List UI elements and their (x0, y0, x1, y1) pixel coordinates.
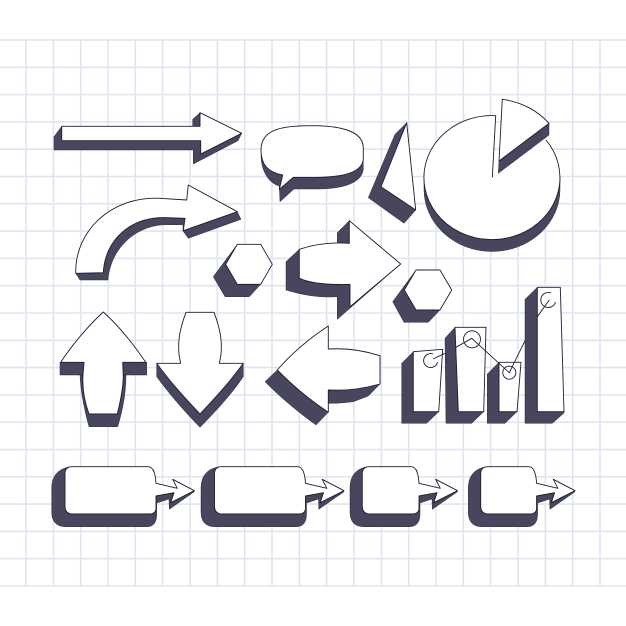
icon: right hexagon (393, 270, 452, 322)
flow box arrow 1 (52, 467, 194, 527)
icon: triangle (368, 123, 416, 223)
icon: down arrow (157, 312, 243, 427)
bar 3 (487, 362, 521, 423)
bar 4 (525, 287, 564, 423)
flow box arrow 4 (468, 467, 575, 527)
icon: left arrow (265, 326, 380, 425)
pie chart (424, 99, 560, 252)
icon: curved right arrow (76, 185, 241, 280)
flow box arrow 2 (201, 467, 344, 527)
flow box arrow 3 (350, 467, 458, 527)
trend line with markers (424, 292, 556, 379)
icon: up arrow (60, 312, 147, 427)
icon: left hexagon (213, 244, 272, 297)
bar 1 (402, 349, 443, 423)
icon: long straight right arrow (54, 113, 242, 164)
pie main slice (424, 116, 560, 240)
pie base side (424, 178, 560, 252)
icon: centre right arrow (286, 221, 401, 319)
bar chart (402, 287, 564, 423)
pie detached wedge (498, 99, 549, 173)
icon: speech bubble (261, 126, 363, 202)
bar 2 (445, 327, 486, 423)
